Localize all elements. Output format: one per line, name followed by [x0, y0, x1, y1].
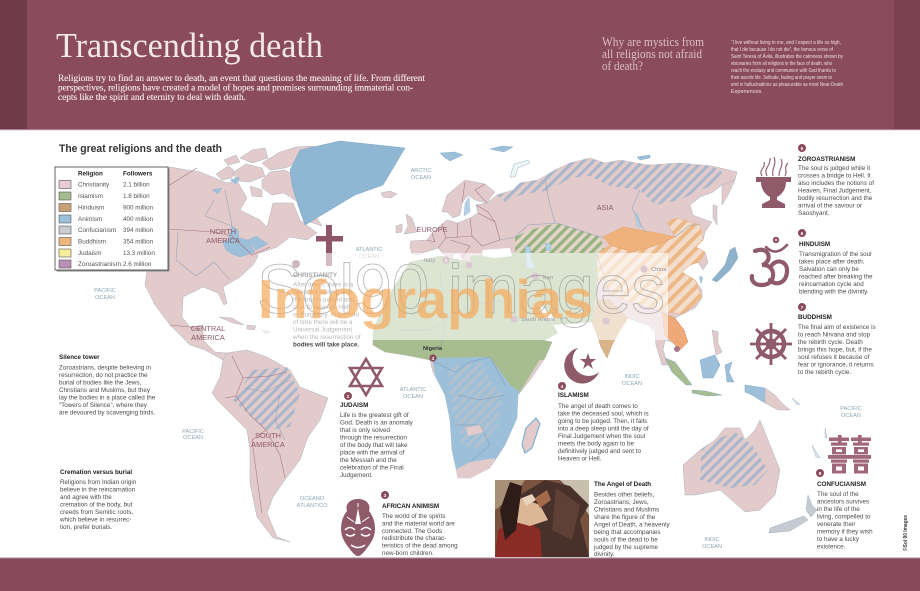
map: Mongolia [603, 227, 675, 252]
panel: Zoroastrianism: Saoshyant. [798, 210, 830, 217]
text block: Silence tower: resurrection, do not practice the [59, 372, 148, 379]
map: inland seas [464, 197, 641, 268]
legend: Judaism: Judaism [78, 250, 101, 257]
text block: The Angel of Death: Zoroastrians, Jews, [594, 499, 649, 506]
panel: Zoroastrianism: ZOROASTRIANISM [798, 156, 855, 163]
text block: The Angel of Death: share the figure of the [594, 514, 656, 521]
map: Siberian hatching [497, 158, 722, 205]
panel: Islamism: into a deep sleep until the day of [558, 426, 649, 432]
legend: Judaism [59, 249, 155, 257]
legend: Islamism [59, 192, 150, 200]
icon: cross [316, 225, 343, 266]
panel: Zoroastrianism [756, 144, 874, 217]
Nigeria label: 3 [432, 356, 435, 362]
text block: The Angel of Death: being that accompanies [594, 529, 661, 536]
map: Africa [370, 250, 560, 482]
panel: Zoroastrianism: bodily resurrection and the [798, 195, 873, 202]
badge: Indochina [674, 346, 680, 352]
map: New Zealand [769, 495, 817, 533]
intro paragraph: cepts like the spirit and eternity to deal with death. [58, 92, 246, 102]
icon: dharma wheel [750, 323, 792, 365]
chart heading: The great religions and the death [59, 143, 222, 155]
text block: The Angel of Death: Angel of Death, a heavenly [594, 522, 670, 528]
legend: Animism: Animism [78, 216, 102, 223]
panel: Islamism: Final Judgement when the soul [558, 433, 645, 440]
map: Middle East [470, 253, 600, 348]
ocean labels: INDIC [704, 537, 720, 543]
panel: African animism: and the material world are [382, 520, 455, 528]
legend: Zoroastrianism: Zoroastrianism [78, 261, 121, 268]
panel: Confucianism: venerate their [817, 521, 856, 528]
map: US borders [168, 168, 197, 186]
legend: Islamism: Islamism [78, 193, 103, 200]
quote text: end in hallucinations as pleasurable as most Near-Death [731, 82, 843, 88]
ocean labels: ATLÁNTICO [297, 502, 328, 509]
ocean labels: ATLANTIC [356, 247, 382, 253]
panel: Zoroastrianism: also includes the notions of [798, 180, 874, 187]
legend: Christianity: 2.1 billion [123, 182, 150, 188]
continent labels: NORTH [210, 227, 236, 236]
map: Pacific islands [792, 398, 827, 458]
panel: Confucianism: 8 [819, 471, 822, 477]
watermark outlined wordmark: Sol90 images [257, 250, 665, 328]
legend: Confucianism [59, 226, 154, 234]
badge: Italy: 1 [445, 258, 448, 264]
panel: Zoroastrianism: arrival of the saviour or [798, 202, 862, 210]
panel: Confucianism: The soul of the [817, 491, 859, 498]
map: Canadian Arctic islands [216, 146, 322, 226]
icon: double happiness counters [836, 449, 864, 470]
panel: Buddhism [750, 303, 876, 376]
quote text: reach the ecstasy and communion with God thanks to [731, 68, 836, 74]
quote text: Experiences. [731, 89, 763, 95]
legend: Confucianism: Confucianism [78, 227, 116, 234]
panel: Christianity: when the resurrection of [292, 334, 361, 341]
icon: om [752, 239, 787, 285]
ocean labels: ARCTIC [411, 168, 431, 174]
continent labels: CENTRAL [191, 324, 225, 333]
map: China hatching [597, 218, 705, 314]
map: Madagascar [522, 418, 540, 453]
panel: Confucianism: to have a lucky [817, 536, 860, 543]
panel: Islamism: going to be judged. Then, it falls [558, 418, 647, 425]
map: India [592, 300, 628, 358]
text block: Cremation versus burial: tion, prefer burials. [60, 524, 112, 531]
map: South American borders [225, 356, 243, 398]
ocean labels: OCEAN [702, 544, 722, 550]
panel: Buddhism: to reach Nirvana and stop [798, 332, 871, 338]
legend: Religion [78, 170, 103, 178]
map: Iceland [381, 191, 397, 198]
ocean labels: PACIFIC [182, 429, 204, 435]
panel: Islamism: ISLAMISM [558, 392, 589, 399]
icon: crescent and star [564, 348, 599, 383]
panel: Buddhism: BUDDHISM [798, 314, 832, 321]
panel: Christianity: Universal Judgement [293, 326, 352, 334]
badge: Saudi Arabia: Saudi Arabia [521, 317, 556, 323]
badge: Turkey [466, 262, 472, 268]
panel: Judaism: that is only solved [340, 427, 391, 434]
Nigeria label: Nigeria [423, 346, 443, 352]
panel: Confucianism [816, 435, 873, 550]
watermark orange wordmark: Infographias [258, 268, 593, 330]
panel: African animism: redistribute the charac- [382, 535, 446, 542]
map: Asia borders [500, 180, 700, 312]
header band [0, 0, 920, 130]
legend: Confucianism: 394 million [123, 227, 154, 234]
text block: Cremation versus burial: and agree with the [60, 494, 112, 501]
text block: Cremation versus burial: Religions from Indian origin [60, 479, 137, 486]
ocean labels: OCEAN [622, 381, 642, 387]
badge: Italy: Italy [424, 258, 436, 264]
panel: Hinduism: takes place after death. [799, 258, 865, 266]
text block: The Angel of Death: Besides other beliefs, [594, 492, 654, 498]
ocean labels: OCEAN [411, 175, 431, 181]
map: Black Sea [482, 248, 512, 258]
text block: The Angel of Death: judged by the supreme [593, 544, 659, 551]
panel: Judaism: place with the arrival of [340, 450, 405, 456]
panel: Buddhism: brings this hope, but, if the [798, 346, 872, 354]
legend: Zoroastrianism: 2.6 million [123, 261, 152, 268]
text block: Cremation versus burial: which believe in resurrec- [59, 516, 131, 524]
legend: Animism: 400 million [123, 216, 154, 223]
panel: Islamism: definitively judged and sent to [558, 448, 641, 455]
quote text: visionaries from all religions in the face of death, who [731, 61, 832, 67]
text block: Silence tower: “Towers of Silence”, where they [59, 402, 148, 409]
text block: The Angel of Death: Christians and Muslims [594, 506, 659, 514]
quote text: their ascetic life. Solitude, fasting and prayer seem to [731, 75, 832, 81]
panel: Judaism: the Messiah and the [340, 457, 397, 464]
country labels and badges [424, 256, 680, 352]
text block: Silence tower: are devoured by scavenging birds. [59, 410, 156, 416]
text block: The Angel of Death: souls of the dead to be [594, 536, 658, 544]
map: Scandinavia [442, 180, 495, 218]
map: British Isles [396, 214, 417, 234]
panel: Islamism: 4 [561, 384, 564, 390]
map: North American lakes [212, 177, 268, 257]
panel: Judaism [340, 359, 414, 479]
map: Greenland [290, 141, 405, 225]
map: Svalbard and Arctic islands [440, 146, 650, 177]
panel: Judaism: 2 [347, 394, 350, 400]
panel: Islamism: meets the body again to be [558, 440, 634, 448]
panel: Christianity: sent to Heaven, Hell [293, 304, 350, 311]
text block: Cremation versus burial: creeds from Semitic roots, [60, 509, 133, 516]
legend: Hinduism: Hinduism [78, 204, 104, 212]
icon: fire vessel [756, 157, 791, 208]
legend: Hinduism [59, 204, 154, 212]
panel: Buddhism: the rebirth cycle. Death [798, 339, 863, 346]
panel: Hinduism: blending with the divinity. [799, 288, 869, 296]
continent labels: SOUTH [255, 431, 281, 440]
icon: mask [341, 499, 375, 556]
map: Amazon hatching [233, 367, 300, 430]
quote text: Saint Teresa of Ávila, illustrates the calmness shown by [731, 53, 843, 60]
panel: Christianity: of time there will be a [293, 319, 353, 326]
intro paragraph: Religions try to find an answer to death, an event that questions the meaning of life. From different [58, 73, 426, 83]
panel: African animism: 3 [384, 493, 387, 499]
panel: Hinduism: Salvation can only be [799, 266, 859, 273]
icon: double happiness [828, 435, 871, 474]
legend: Buddhism: Buddhism [78, 238, 106, 246]
panel: Judaism: Judgement. [340, 472, 373, 479]
badge: Iran [531, 272, 554, 281]
question heading: Why are mystics from [602, 35, 704, 49]
panel: Buddhism: The final aim of existence is [798, 324, 876, 331]
panel: Zoroastrianism: crosses a bridge to Hell. It [798, 172, 871, 180]
panel: Christianity: or Purgatory. At the end [293, 312, 360, 318]
legend: Buddhism [59, 238, 154, 246]
legend: Buddhism: 354 million [123, 238, 154, 246]
ocean labels: OCEAN [841, 413, 861, 419]
badge: India [602, 317, 610, 325]
panel: Zoroastrianism: Heaven, Final Judgement, [798, 188, 872, 194]
text block: Silence tower: Christians and Muslims, but they [59, 387, 151, 394]
legend: Hinduism: 900 million [123, 204, 154, 212]
panel: African animism: The world of the spirits [382, 513, 445, 520]
ocean labels: PACIFIC [94, 288, 116, 294]
continent labels: AMERICA [251, 440, 285, 449]
map: Southeast Asian islands [665, 276, 790, 410]
panel: Buddhism: soul refuses it because of [798, 354, 870, 361]
ocean labels [94, 168, 862, 550]
panel: Confucianism: memory if they wish [817, 528, 873, 536]
Nigeria label [423, 346, 443, 362]
panel: Buddhism: 7 [801, 305, 804, 311]
text block: Cremation versus burial [59, 469, 137, 531]
text block: Cremation versus burial: cremation of the body, but [60, 502, 133, 508]
panel: Islamism: take the deceased soul, which is [558, 410, 649, 418]
panel: Hinduism [752, 229, 873, 296]
panel: Judaism: God. Death is an anomaly [340, 420, 414, 426]
text block: The Angel of Death: The Angel of Death [594, 481, 651, 488]
continent labels: EUROPE [416, 225, 448, 234]
continent labels [191, 203, 613, 449]
map: North America [140, 167, 317, 360]
legend: Followers [123, 170, 153, 178]
panel: Christianity: the soul is judged and [293, 296, 355, 304]
panel: Hinduism: 6 [801, 231, 804, 237]
panel: Buddhism: fear or ignorance, it returns [798, 362, 874, 368]
legend: Zoroastrianism [59, 260, 152, 268]
continent labels: AMERICA [206, 236, 240, 245]
legend: Christianity: Christianity [78, 182, 110, 188]
legend: Animism [59, 215, 154, 223]
panel: Judaism: Life is the greatest gift of [340, 412, 409, 419]
continent labels: ASIA [597, 203, 613, 212]
panel: Buddhism: to the rebirth cycle. [798, 369, 851, 376]
quote text: “I live without living in me, and I expect a life so high, [731, 40, 841, 46]
badge: Italy [424, 256, 450, 264]
panel: Islamism [558, 348, 649, 462]
map: Europe borders [427, 182, 500, 258]
intro paragraph: perspectives, religions have created a model of hopes and promises surrounding immaterial con- [58, 82, 413, 92]
quote text: that I die because I do not die”, the famous verse of [731, 47, 833, 53]
text block: The Angel of Death [593, 481, 670, 558]
panel: African animism: teristics of the dead among [382, 542, 458, 550]
map: Japan [712, 247, 738, 282]
icon: star of David [350, 359, 382, 395]
ocean labels: OCEAN [359, 254, 379, 260]
map: South America [212, 350, 328, 542]
panel: African animism: AFRICAN ANIMISM [382, 503, 439, 510]
panel: African animism: new-born children. [382, 550, 434, 557]
legend: Islamism: 1.8 billion [123, 193, 150, 200]
text block: The Angel of Death: divinity. [594, 551, 615, 558]
text block: Silence tower [59, 354, 156, 416]
text block: Silence tower: Silence tower [59, 354, 100, 361]
panel: Christianity: CHRISTIANITY [293, 272, 338, 279]
panel: Christianity [292, 225, 361, 348]
question heading: of death? [602, 59, 643, 73]
panel: Islamism: Heaven or Hell. [558, 456, 602, 462]
question heading: all religions not afraid [602, 47, 703, 61]
badge: Saudi Arabia [510, 315, 556, 323]
panel: Christianity: After death, there is a [293, 282, 354, 288]
legend: Christianity [59, 180, 150, 188]
ocean labels: OCEAN [183, 435, 203, 441]
badge: China: China [651, 267, 667, 273]
panel: Hinduism: HINDUISM [799, 241, 830, 248]
ocean labels: OCÉANO [300, 495, 325, 502]
panel: Hinduism: reincarnation cycle and [799, 281, 864, 288]
ocean labels: ATLANTIC [400, 387, 426, 393]
ocean labels: INDIC [624, 374, 640, 380]
map: Eurasia [410, 158, 737, 365]
map: Australia [683, 420, 780, 512]
ocean labels: OCEAN [95, 295, 115, 301]
text block: Cremation versus burial: believe in the reincarnation [60, 486, 136, 494]
legend [55, 167, 170, 272]
panel: Confucianism: in the life of the [817, 506, 860, 513]
bottom band [0, 557, 920, 591]
panel: African animism: connected. The Gods [382, 528, 442, 535]
panel: Confucianism: ancestors survives [817, 498, 869, 506]
text block: Silence tower: lay the bodies in a place called the [59, 394, 156, 402]
watermark veil [258, 253, 668, 340]
panel: Judaism: through the resurrection [340, 434, 407, 442]
map: Central Asia hatching [515, 223, 605, 256]
panel: Hinduism: Transmigration of the soul [799, 251, 872, 258]
panel: Islamism: The angel of death comes to [558, 403, 638, 410]
world map [140, 141, 827, 542]
legend: Judaism: 13.3 million [123, 250, 155, 257]
panel: Judaism: JUDAISM [340, 402, 368, 409]
map: Caribbean islands [219, 317, 270, 334]
ocean labels: OCEAN [403, 394, 423, 400]
badge: Iran: Iran [543, 275, 554, 281]
panel: Confucianism: existence. [817, 544, 846, 550]
map: Southeast Asia [662, 312, 688, 350]
panel: Confucianism: CONFUCIANISM [817, 481, 866, 488]
image credit: ©Sol 90 Images [902, 515, 909, 551]
map: Kamchatka and Sakhalin [713, 180, 735, 225]
panel: African animism [341, 491, 458, 557]
title: Transcending death [56, 26, 323, 65]
panel: Christianity: period of waiting until [293, 289, 352, 296]
panel: Christianity: bodies will take place. [293, 342, 359, 348]
text block: Cremation versus burial: Cremation versus burial [60, 469, 132, 476]
map: Persian Gulf [537, 303, 553, 322]
panel: Confucianism: living, compelled to [817, 514, 871, 520]
panel: Judaism: of the body that will take [340, 442, 408, 449]
panel: Zoroastrianism: 5 [801, 146, 804, 152]
ocean labels: PACIFIC [840, 406, 862, 412]
text block: Silence tower: burial of bodies like the Jews, [59, 380, 142, 386]
painting: angel of death [495, 480, 589, 557]
text block: Silence tower: Zoroastrians, despite believing in [59, 364, 152, 372]
badge: China [640, 265, 667, 273]
panel: Judaism: celebration of the Final [340, 464, 404, 472]
continent labels: AMERICA [191, 333, 225, 342]
panel: Hinduism: reached after breaking the [799, 274, 873, 280]
panel: Zoroastrianism: The soul is judged while it [798, 165, 870, 172]
